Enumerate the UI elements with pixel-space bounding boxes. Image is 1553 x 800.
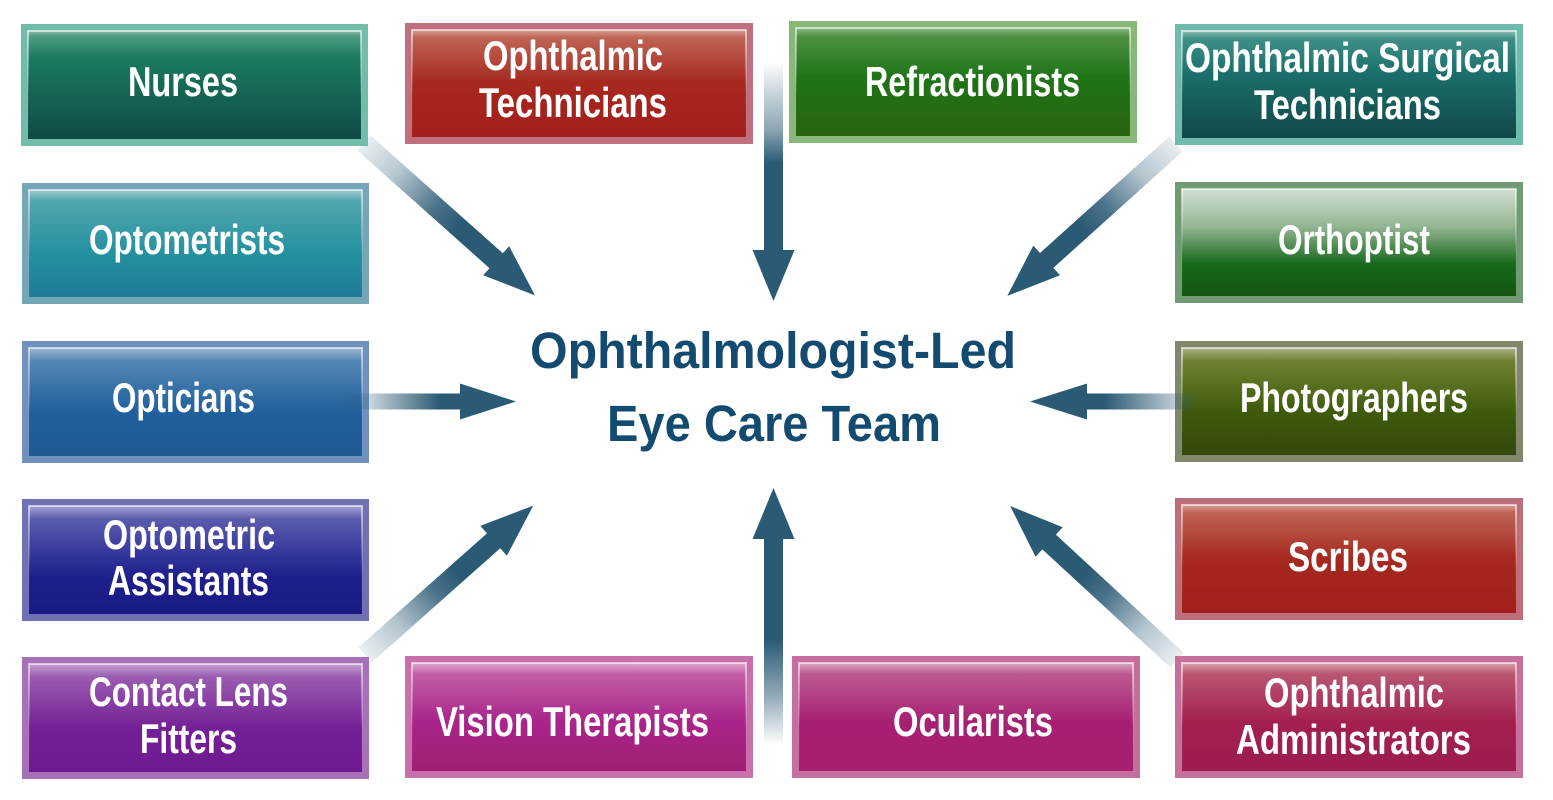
- box: Orthoptist: Orthoptist: [1278, 216, 1430, 263]
- title: Ophthalmologist-Led Eye Care Team: Ophthalmologist-Led: [530, 322, 1016, 379]
- box: Contact Lens Fitters: [22, 657, 369, 779]
- box: Contact Lens Fitters: Contact Lens: [89, 668, 288, 715]
- box: Opticians: [22, 341, 369, 463]
- arrow: Ophthalmic Surgical Technicians to centre: [994, 129, 1189, 311]
- box: Ocularists: Ocularists: [893, 698, 1053, 745]
- box: Vision Therapists: [405, 656, 753, 778]
- arrow: Ophthalmic Administrators to centre: [997, 491, 1191, 675]
- box: Nurses: Nurses: [128, 58, 238, 105]
- arrow: Photographers to centre: [1030, 384, 1195, 420]
- arrow: Ocularists and Vision Therapists to centre: [752, 488, 794, 750]
- arrow: Opticians to centre: [335, 384, 516, 420]
- box: Photographers: Photographers: [1240, 374, 1468, 421]
- box: Ophthalmic Surgical Technicians: [1175, 24, 1523, 145]
- box: Ophthalmic Technicians: Technicians: [479, 79, 667, 126]
- box: Ophthalmic Technicians: Ophthalmic: [483, 32, 663, 79]
- box: Contact Lens Fitters: Fitters: [140, 715, 237, 762]
- box: Ophthalmic Administrators: [1175, 656, 1523, 778]
- box: Ocularists: [792, 656, 1140, 778]
- box: Refractionists: [789, 21, 1137, 143]
- box: Optometric Assistants: [22, 499, 369, 621]
- box: Scribes: Scribes: [1288, 533, 1408, 580]
- arrow: Nurses to centre: [351, 128, 548, 310]
- box: Refractionists: Refractionists: [865, 58, 1080, 105]
- box: Optometrists: Optometrists: [89, 216, 285, 263]
- box: Scribes: [1175, 498, 1523, 620]
- title: Ophthalmologist-Led Eye Care Team: [530, 322, 1016, 452]
- box: Opticians: Opticians: [112, 374, 255, 421]
- box: Photographers: [1175, 341, 1523, 462]
- box: Vision Therapists: Vision Therapists: [436, 698, 709, 745]
- title: Ophthalmologist-Led Eye Care Team: Eye Care Team: [607, 395, 941, 452]
- arrow: Refractionists to centre: [752, 40, 794, 301]
- box: Optometric Assistants: Assistants: [108, 557, 269, 604]
- box: Orthoptist: [1175, 182, 1523, 303]
- box: Ophthalmic Surgical Technicians: Technicians: [1254, 81, 1441, 128]
- box: Ophthalmic Administrators: Ophthalmic: [1264, 669, 1444, 716]
- box: Optometrists: [22, 183, 369, 304]
- box: Optometric Assistants: Optometric: [103, 511, 275, 558]
- box: Nurses: [21, 24, 368, 146]
- arrow: Contact Lens Fitters to centre: [352, 491, 547, 670]
- box: Ophthalmic Technicians: [405, 23, 753, 144]
- box: Ophthalmic Administrators: Administrators: [1236, 716, 1471, 763]
